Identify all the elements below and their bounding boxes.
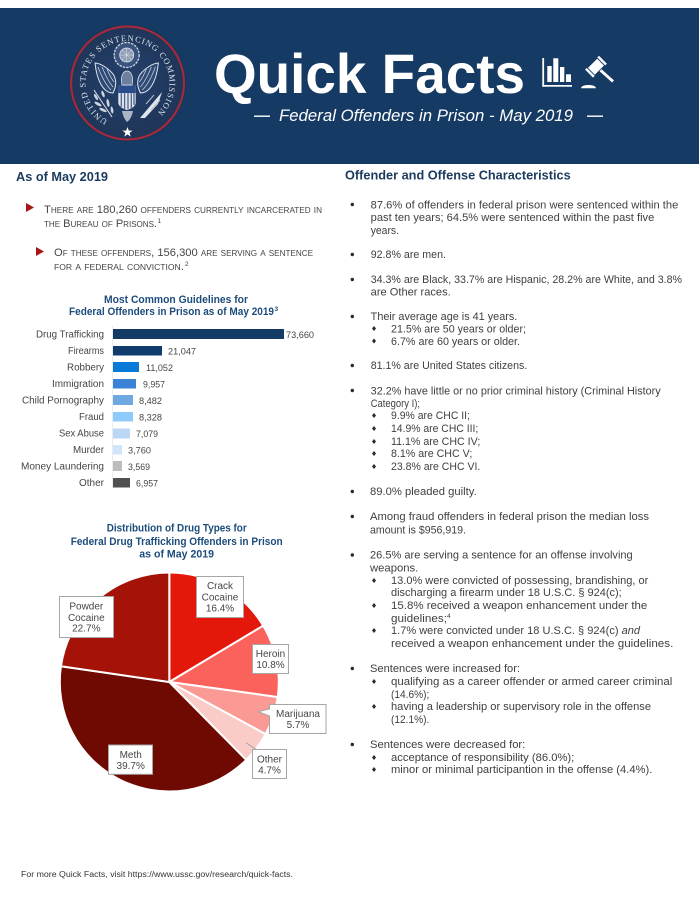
- chart title: as of May 2019: [139, 548, 214, 560]
- label: meth: 39.7%: [117, 761, 145, 772]
- fact: citizenship: 81.1% are United States citizens.: [371, 360, 527, 372]
- text block: federal conviction: for a federal conviction.: [54, 261, 184, 273]
- footer note: For more Quick Facts, visit https://www.ussc.gov/research/quick-facts.: [21, 870, 293, 879]
- text block: incarcerated offenders: the Bureau of Prisons.: [44, 218, 157, 230]
- bar: firearms: 21,047: [168, 346, 196, 358]
- bar: murder: [73, 445, 151, 456]
- bar: drug trafficking: [36, 329, 314, 341]
- label: other: Other: [257, 754, 283, 765]
- fact: time since sentencing: years.: [371, 225, 399, 237]
- text block: federal conviction: [36, 247, 313, 273]
- label: marijuana: Marijuana: [276, 709, 320, 720]
- fact: criminal history: 9.9% are CHC II;: [391, 410, 470, 422]
- label: crack cocaine: [196, 576, 244, 618]
- bar: immigration: 9,957: [143, 380, 165, 390]
- fact: criminal history: 23.8% are CHC VI.: [391, 461, 480, 473]
- bar: robbery: Robbery: [67, 362, 104, 374]
- fact: sentence increases: (12.1%).: [391, 714, 429, 726]
- fact: time since sentencing: 87.6% of offenders in federal prison were sentenced within the: [371, 199, 678, 211]
- fact: sentence increases: qualifying as a career offender or armed career criminal: [391, 676, 672, 688]
- bar: sex abuse: 7,079: [136, 429, 158, 440]
- fact: sentence increases: [370, 663, 672, 726]
- label: powder cocaine: [60, 596, 114, 638]
- fact: guilty pleas: 89.0% pleaded guilty.: [370, 486, 477, 498]
- bar: drug trafficking: 73,660: [286, 330, 314, 341]
- fact: gender: 92.8% are men.: [371, 249, 446, 261]
- chart title: Most Common Guidelines for: [104, 294, 248, 306]
- label: heroin: [252, 644, 288, 674]
- label: marijuana: 5.7%: [287, 720, 310, 731]
- icon: gavel: [581, 56, 614, 88]
- bar: other: Other: [79, 478, 105, 489]
- bar: fraud: [79, 412, 162, 424]
- bar: fraud: Fraud: [79, 412, 104, 423]
- chart title: [69, 294, 278, 318]
- fact: criminal history: 14.9% are CHC III;: [391, 423, 478, 435]
- icon: US Sentencing Commission seal: UNITED STATES SENTENCING COMMISSION: [80, 35, 176, 125]
- heading: as of May 2019: As of May 2019: [16, 169, 108, 184]
- bar: firearms: Firearms: [68, 346, 104, 357]
- bar: money laundering: [21, 461, 150, 473]
- title: Quick Facts: [214, 42, 525, 105]
- chart title: Federal Drug Trafficking Offenders in Prison: [71, 536, 283, 548]
- bar: money laundering: 3,569: [128, 462, 150, 473]
- label: meth: [108, 745, 152, 774]
- label: crack cocaine: Cocaine: [202, 593, 239, 604]
- text block: federal conviction: Of these offenders, 156,300 are serving a sentence: [54, 247, 313, 259]
- label: powder cocaine: Cocaine: [68, 613, 105, 624]
- bar: fraud: 8,328: [139, 412, 162, 424]
- heading: offender and offense characteristics: Offender and Offense Characteristics: [345, 168, 571, 183]
- fact: weapons: guidelines;: [391, 613, 447, 625]
- label: marijuana: [258, 704, 326, 734]
- fact: weapons: 1.7% were convicted under 18 U.S.C. § 924(c) and: [391, 625, 641, 637]
- icon: bar chart: [542, 58, 572, 87]
- label: crack cocaine: 16.4%: [206, 604, 234, 615]
- bar: other: 6,957: [136, 478, 158, 490]
- bar: firearms: [68, 346, 196, 358]
- text block: federal conviction: 2: [185, 261, 189, 268]
- bar: child pornography: 8,482: [139, 396, 162, 407]
- chart title: Distribution of Drug Types for: [107, 523, 247, 535]
- bar: other: [79, 478, 158, 490]
- fact: weapons: received a weapon enhancement under the guidelines.: [391, 638, 673, 650]
- bar chart: most common guidelines: [21, 294, 314, 490]
- fact: age: 6.7% are 60 years or older.: [391, 336, 520, 348]
- fact: criminal history: 32.2% have little or no prior criminal history (Criminal History: [371, 385, 661, 397]
- fact: race: are Other races.: [371, 286, 451, 298]
- fact: sentence decreases: acceptance of responsibility (86.0%);: [391, 752, 574, 764]
- fact: criminal history: 8.1% are CHC V;: [391, 448, 472, 460]
- bar: robbery: [67, 362, 173, 374]
- fact: weapons: 4: [447, 613, 451, 620]
- panel: as of May 2019: [16, 169, 322, 273]
- bar: murder: Murder: [73, 445, 105, 456]
- chart title: [71, 523, 283, 560]
- bar: immigration: Immigration: [52, 379, 104, 390]
- label: meth: Meth: [120, 750, 142, 761]
- text block: incarcerated offenders: There are 180,260 offenders currently incarcerated in: [44, 204, 322, 216]
- text block: incarcerated offenders: 1: [158, 218, 162, 225]
- pie slices: [60, 572, 279, 792]
- fact: weapons: 15.8% received a weapon enhancement under the: [391, 600, 647, 612]
- text block: incarcerated offenders: [26, 203, 322, 230]
- label: crack cocaine: Crack: [207, 581, 234, 592]
- fact: time since sentencing: [371, 199, 678, 237]
- bar: murder: 3,760: [128, 446, 151, 456]
- chart title: Federal Offenders in Prison as of May 2019: [69, 306, 274, 318]
- fact: fraud loss: Among fraud offenders in federal prison the median loss: [370, 511, 650, 523]
- fact: age: Their average age is 41 years.: [371, 311, 517, 323]
- label: powder cocaine: 22.7%: [72, 624, 101, 635]
- fact: criminal history: [371, 385, 661, 473]
- fact: weapons: 13.0% were convicted of possessing, brandishing, or: [391, 575, 649, 587]
- fact: sentence increases: having a leadership or supervisory role in the offense: [391, 701, 651, 713]
- fact: race: [371, 274, 682, 298]
- bar: drug trafficking: Drug Trafficking: [36, 330, 104, 340]
- bullet list markers: [351, 203, 376, 772]
- pie chart: distribution of drug types: [60, 523, 326, 792]
- fact: sentence decreases: Sentences were decreased for:: [370, 739, 525, 751]
- bar: money laundering: Money Laundering: [21, 462, 104, 472]
- chart title: 3: [274, 306, 278, 313]
- header banner: [0, 8, 699, 164]
- fact: age: [371, 311, 526, 348]
- bar: sex abuse: [59, 428, 158, 440]
- fact: fraud loss: [370, 511, 650, 536]
- bar: child pornography: [22, 395, 162, 407]
- bar: sex abuse: Sex Abuse: [59, 428, 105, 440]
- fact: sentence decreases: minor or minimal participantion in the offense (4.4%).: [391, 764, 652, 776]
- fact: weapons: discharging a firearm under 18 U.S.C. § 924(c);: [391, 587, 622, 599]
- fact: sentence increases: (14.6%);: [391, 689, 429, 701]
- bar: robbery: 11,052: [146, 363, 173, 374]
- bar: immigration: [52, 379, 165, 390]
- label: other: [246, 743, 286, 778]
- fact: sentence decreases: [370, 739, 652, 776]
- label: heroin: Heroin: [256, 649, 285, 660]
- fact: sentence increases: Sentences were increased for:: [370, 663, 520, 675]
- fact: weapons: 26.5% are serving a sentence for an offense involving: [370, 549, 633, 561]
- fact: time since sentencing: past ten years; 64.5% were sentenced within the past five: [371, 212, 654, 224]
- fact: age: 21.5% are 50 years or older;: [391, 323, 526, 335]
- fact: weapons: [369, 549, 673, 650]
- fact: race: 34.3% are Black, 33.7% are Hispanic, 28.2% are White, and 3.8%: [371, 274, 682, 286]
- fact: criminal history: 11.1% are CHC IV;: [391, 436, 480, 448]
- label: powder cocaine: Powder: [69, 601, 104, 612]
- subtitle: Federal Offenders in Prison - May 2019: [279, 106, 574, 125]
- bar: child pornography: Child Pornography: [22, 396, 104, 406]
- label: other: 4.7%: [258, 765, 281, 776]
- panel: offender and offense characteristics: [345, 168, 682, 776]
- fact: criminal history: Category I);: [371, 398, 420, 410]
- fact: weapons: weapons.: [369, 562, 418, 574]
- fact: fraud loss: amount is $956,919.: [370, 524, 466, 536]
- label: heroin: 10.8%: [256, 660, 285, 671]
